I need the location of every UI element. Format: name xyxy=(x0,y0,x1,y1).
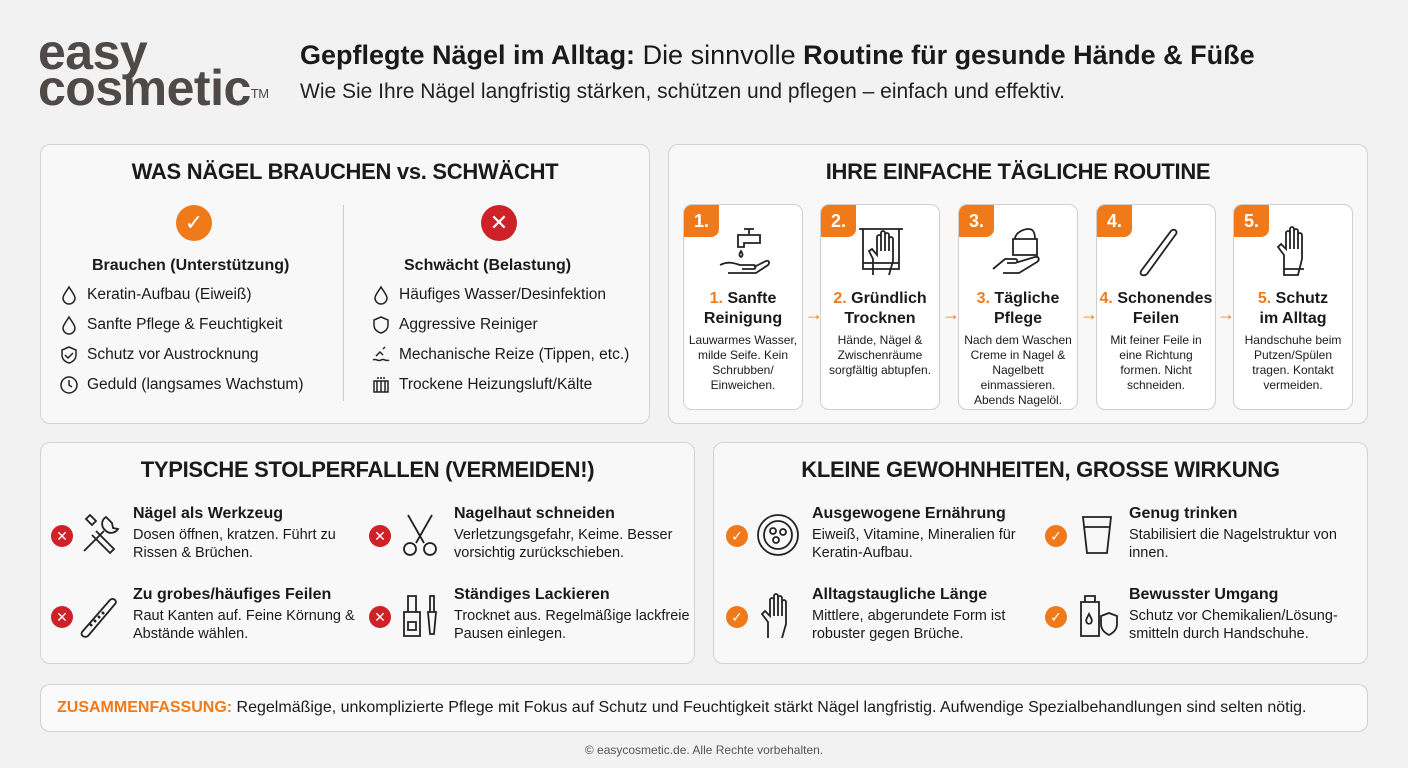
habit: drink: ✓ xyxy=(1050,528,1062,544)
icon: check xyxy=(176,205,212,241)
step 4: 4. Schonendes xyxy=(1100,290,1212,307)
heading: TYPISCHE STOLPERFALLEN (VERMEIDEN!) xyxy=(141,457,594,482)
list: weakens: Mechanische Reize (Tippen, etc.) xyxy=(399,346,629,363)
pitfall: cuticle: ✕ xyxy=(374,528,386,544)
step 2: 2. Gründlich xyxy=(833,290,927,307)
icon: check: ✓ xyxy=(185,210,203,235)
step 1: 1. xyxy=(694,211,709,231)
summary: ZUSAMMENFASSUNG: Regelmäßige, unkomplizierte Pflege mit Fokus auf Schutz und Feuchtigkeit stärkt Nägel langfristig. Aufwendige Spezialbehandlungen sind selten nötig. xyxy=(57,699,1306,716)
list: weakens xyxy=(372,286,629,393)
list: needs: Sanfte Pflege & Feuchtigkeit xyxy=(87,316,283,333)
arrow: → xyxy=(942,304,960,324)
panel: needs vs weakens xyxy=(40,144,650,424)
step 2 xyxy=(820,204,940,410)
step 3: Nach dem Waschen Creme in Nagel & Nagelbett einmassieren. Abends Nagelöl. xyxy=(964,333,1072,407)
pitfall: cuticle: Nagelhaut schneiden xyxy=(454,505,615,522)
step 5: im Alltag xyxy=(1260,310,1326,327)
step 3: 3. Tägliche xyxy=(977,290,1059,307)
step 3: 3. xyxy=(969,211,984,231)
title: Gepflegte Nägel im Alltag: Die sinnvolle Routine für gesunde Hände & Füße xyxy=(300,40,1255,70)
pitfall: cuticle xyxy=(369,505,672,561)
heading: KLEINE GEWOHNHEITEN, GROSSE WIRKUNG xyxy=(801,457,1280,482)
habit: drink xyxy=(1045,505,1337,561)
heading: IHRE EINFACHE TÄGLICHE ROUTINE xyxy=(826,159,1210,184)
habit: length: ✓ xyxy=(731,609,743,625)
pitfall: filing: Zu grobes/häufiges Feilen xyxy=(133,586,331,603)
logo: cosmeticTM xyxy=(38,60,269,116)
panel: daily routine xyxy=(668,144,1368,424)
arrow: → xyxy=(805,304,823,324)
footer: © easycosmetic.de. Alle Rechte vorbehalten. xyxy=(585,743,823,757)
summary xyxy=(40,684,1368,732)
pitfall: cuticle: Verletzungsgefahr, Keime. Besser vorsichtig zurückschieben. xyxy=(454,527,672,561)
step 2: Trocknen xyxy=(844,310,916,327)
list: needs: Keratin-Aufbau (Eiweiß) xyxy=(87,286,252,303)
panel: small habits xyxy=(713,442,1368,664)
step 1: 1. Sanfte xyxy=(710,290,776,307)
pitfall: polish: Trocknet aus. Regelmäßige lackfreie Pausen einlegen. xyxy=(454,608,690,642)
pitfall: tool: Dosen öffnen, kratzen. Führt zu Rissen & Brüchen. xyxy=(133,527,336,561)
logo: easy xyxy=(38,24,147,80)
subtitle: Wie Sie Ihre Nägel langfristig stärken, schützen und pflegen – einfach und effektiv. xyxy=(300,80,1065,103)
step 2: 2. xyxy=(831,211,846,231)
list: weakens: Trockene Heizungsluft/Kälte xyxy=(399,376,592,393)
step 3: Pflege xyxy=(994,310,1042,327)
step 4: Mit feiner Feile in eine Richtung formen. Nicht schneiden. xyxy=(1110,333,1202,392)
pitfall: filing: ✕ xyxy=(56,609,68,625)
step 1 xyxy=(683,204,803,410)
step 5: 5. xyxy=(1244,211,1259,231)
step 4 xyxy=(1096,204,1216,410)
pitfall: filing: Raut Kanten auf. Feine Körnung & Abstände wählen. xyxy=(133,608,355,642)
list: weakens: Häufiges Wasser/Desinfektion xyxy=(399,286,606,303)
arrow: → xyxy=(1080,304,1098,324)
habit: chemicals: Schutz vor Chemikalien/Lösung-smitteln durch Handschuhe. xyxy=(1129,608,1338,642)
list: needs: Schutz vor Austrocknung xyxy=(87,346,258,363)
icon: cross: ✕ xyxy=(490,210,508,235)
habit: chemicals xyxy=(1045,586,1338,642)
step 5: 5. Schutz xyxy=(1258,290,1328,307)
step 2: Hände, Nägel & Zwischenräume sorgfältig abtupfen. xyxy=(829,333,931,377)
list: needs xyxy=(60,286,304,394)
pitfall: polish xyxy=(369,586,690,642)
step 1: Lauwarmes Wasser, milde Seife. Kein Schrubben/ Einweichen. xyxy=(689,333,797,392)
step 1: Reinigung xyxy=(704,310,782,327)
habit: length: Alltagstaugliche Länge xyxy=(812,586,987,603)
habit: drink: Stabilisiert die Nagelstruktur von innen. xyxy=(1129,527,1337,561)
habit: chemicals: ✓ xyxy=(1050,609,1062,625)
habit: drink: Genug trinken xyxy=(1129,505,1237,522)
pitfall: polish: ✕ xyxy=(374,609,386,625)
step 4: 4. xyxy=(1107,211,1122,231)
pitfall: tool: Nägel als Werkzeug xyxy=(133,505,283,522)
step 3 xyxy=(958,204,1078,410)
step 4: Feilen xyxy=(1133,310,1179,327)
habit: nutrition xyxy=(726,505,1016,561)
habit: length: Mittlere, abgerundete Form ist robuster gegen Brüche. xyxy=(812,608,1005,642)
logo xyxy=(38,24,269,116)
pitfall: tool xyxy=(51,505,336,561)
pitfall: polish: Ständiges Lackieren xyxy=(454,586,610,603)
step 5: Handschuhe beim Putzen/Spülen tragen. Kontakt vermeiden. xyxy=(1245,333,1341,392)
pitfall: tool: ✕ xyxy=(56,528,68,544)
step 5 xyxy=(1233,204,1353,410)
arrow: → xyxy=(1217,304,1235,324)
habit: nutrition: ✓ xyxy=(731,528,743,544)
habit: nutrition: Eiweiß, Vitamine, Mineralien für Keratin-Aufbau. xyxy=(812,527,1016,561)
habit: nutrition: Ausgewogene Ernährung xyxy=(812,505,1006,522)
panel: pitfalls xyxy=(40,442,695,664)
list: weakens: Aggressive Reiniger xyxy=(399,316,538,333)
heading: brauchen: Brauchen (Unterstützung) xyxy=(92,257,289,274)
pitfall: filing xyxy=(51,586,355,642)
list: needs: Geduld (langsames Wachstum) xyxy=(87,376,304,393)
habit: chemicals: Bewusster Umgang xyxy=(1129,586,1278,603)
habit: length xyxy=(726,586,1006,642)
icon: cross xyxy=(481,205,517,241)
heading: WAS NÄGEL BRAUCHEN vs. SCHWÄCHT xyxy=(132,159,558,184)
heading: schwächt: Schwächt (Belastung) xyxy=(404,257,571,274)
